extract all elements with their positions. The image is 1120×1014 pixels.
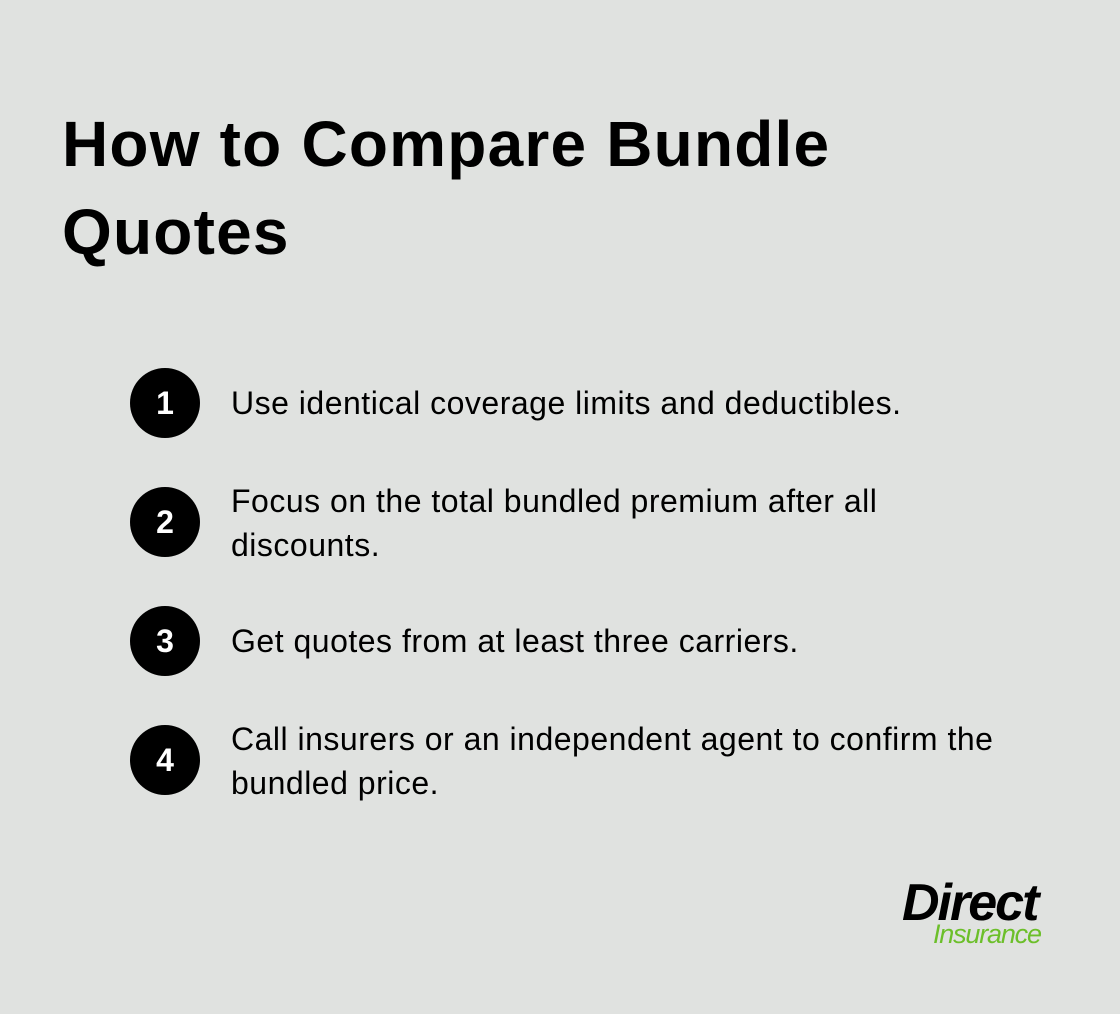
- number badge 3: 3: [156, 623, 174, 659]
- number badge 1: [130, 368, 200, 438]
- step 1 text: Use identical coverage limits and deductibles.: [231, 385, 901, 421]
- number badge 3: [130, 606, 200, 676]
- title: Quotes: [62, 196, 290, 268]
- number badge 4: 4: [156, 742, 174, 778]
- number badge 2: [130, 487, 200, 557]
- step 1: [130, 368, 901, 438]
- step 4 text: bundled price.: [231, 765, 439, 801]
- step 4 text: Call insurers or an independent agent to confirm the: [231, 721, 993, 757]
- step 4: [130, 721, 993, 801]
- step 2 text: Focus on the total bundled premium after all: [231, 483, 877, 519]
- title: How to Compare Bundle: [62, 108, 830, 180]
- logo word Insurance: Insurance: [933, 919, 1041, 949]
- step 3: [130, 606, 799, 676]
- number badge 1: 1: [156, 385, 174, 421]
- step 3 text: Get quotes from at least three carriers.: [231, 623, 799, 659]
- step 2: [130, 483, 877, 563]
- number badge 2: 2: [156, 504, 174, 540]
- step 4 text: [231, 721, 993, 801]
- logo: [902, 874, 1042, 949]
- title: [62, 108, 830, 268]
- logo word Direct: Direct: [902, 874, 1037, 932]
- step 2 text: [231, 483, 877, 563]
- step 2 text: discounts.: [231, 527, 380, 563]
- number badge 4: [130, 725, 200, 795]
